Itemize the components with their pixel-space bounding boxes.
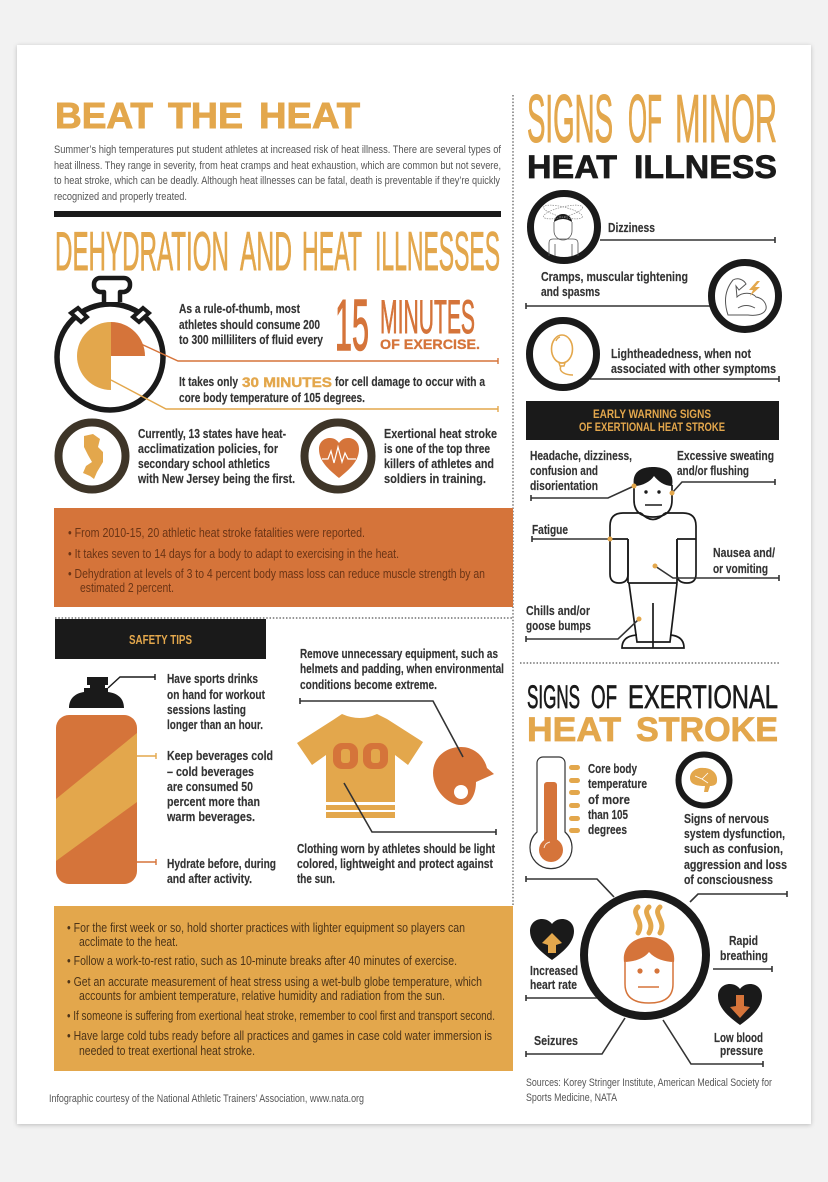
panel: heat stroke facts: • It takes seven to 14 days for a body to adapt to exercising in the heat. xyxy=(68,547,399,561)
sources xyxy=(526,1077,772,1104)
label: cramps: and spasms xyxy=(541,285,600,299)
panel: practice guidelines: • For the first week or so, hold shorter practices with lighter equipment so players can xyxy=(67,921,465,935)
callout: 15 minutes of exercise: 15 xyxy=(335,286,369,366)
exertional heat stroke text: is one of the top three xyxy=(384,442,490,456)
heading: signs of minor heat illness xyxy=(527,81,777,185)
exertional heat stroke text: killers of athletes and xyxy=(384,457,494,471)
label: nausea: or vomiting xyxy=(713,562,768,576)
tip: sports drinks: longer than an hour. xyxy=(167,718,263,732)
fluid rule text xyxy=(179,302,323,347)
pointer lines: early warning xyxy=(526,479,779,642)
fluid rule text: athletes should consume 200 xyxy=(179,318,320,332)
label: nervous system dysfunction: of consciousness xyxy=(684,873,773,887)
icon: stopwatch with pie xyxy=(57,278,163,410)
heading: signs of minor heat illness: OF xyxy=(628,81,662,157)
tip: hydrate: Hydrate before, during xyxy=(167,857,276,871)
tip: hydrate xyxy=(167,857,276,886)
tip: cold beverages: are consumed 50 xyxy=(167,780,253,794)
label: core body temperature xyxy=(588,762,647,837)
label: lightheadedness: Lightheadedness, when not xyxy=(611,347,752,361)
intro text xyxy=(54,144,502,203)
acclimatization text: secondary school athletics xyxy=(138,457,270,471)
fluid rule text: to 300 milliliters of fluid every xyxy=(179,333,323,347)
icon: heart with up arrow xyxy=(530,919,574,960)
pointer lines: heat stroke xyxy=(526,876,787,1067)
label: low blood pressure: pressure xyxy=(720,1044,763,1058)
icon: thermometer xyxy=(530,757,580,869)
icon: heart with down arrow xyxy=(718,984,762,1025)
heading: signs of exertional heat stroke: OF xyxy=(591,679,617,715)
panel: practice guidelines: acclimate to the heat. xyxy=(79,935,178,949)
sources: Sports Medicine, NATA xyxy=(526,1092,618,1104)
title: beat the heat: BEAT xyxy=(55,95,153,136)
panel: practice guidelines: • Have large cold tubs ready before all practices and games in case cold water immersion is xyxy=(67,1029,492,1043)
heading: signs of minor heat illness: HEAT xyxy=(527,149,617,185)
label: rapid breathing: breathing xyxy=(720,949,768,963)
panel: practice guidelines: • Get an accurate measurement of heat stress using a wet-bulb globe temperature, which xyxy=(67,975,482,989)
exertional heat stroke text xyxy=(384,427,497,486)
label: core body temperature: Core body xyxy=(588,762,637,776)
tip: cold beverages: percent more than xyxy=(167,795,260,809)
orange pointer line xyxy=(141,344,498,364)
intro text: heat illness. They range in severity, from heat cramps and heat exhaustion, which are common but not severe, xyxy=(54,160,501,172)
intro text: Summer’s high temperatures put student athletes at increased risk of heat illness. There are several types of xyxy=(54,144,502,156)
heading: dehydration and heat illnesses: HEAT xyxy=(302,220,362,282)
callout: 30 minutes text: core body temperature of 105 degrees. xyxy=(179,391,365,405)
label: nausea: Nausea and/ xyxy=(713,546,775,560)
icon: flexed muscle xyxy=(712,262,778,330)
callout: 30 minutes text: It takes only xyxy=(179,375,238,389)
label: excessive sweating: Excessive sweating xyxy=(677,449,774,463)
label: core body temperature: than 105 xyxy=(588,808,628,822)
panel: practice guidelines: • If someone is suffering from exertional heat stroke, remember to cool first and transport second. xyxy=(67,1009,495,1023)
callout: 15 minutes of exercise xyxy=(335,286,480,366)
heading: signs of exertional heat stroke xyxy=(527,679,778,749)
panel: practice guidelines: accounts for ambient temperature, relative humidity and radiation from the sun. xyxy=(79,989,445,1003)
tip: clothing xyxy=(297,842,496,886)
tip: remove equipment: conditions become extreme. xyxy=(300,678,437,692)
icon: heart with pulse xyxy=(304,422,372,490)
icon: new jersey xyxy=(58,422,126,490)
icon: dizziness xyxy=(530,194,598,260)
tip: sports drinks: on hand for workout xyxy=(167,688,266,702)
tip: sports drinks: Have sports drinks xyxy=(167,672,258,686)
label: chills xyxy=(526,604,591,633)
label: dizziness: Dizziness xyxy=(608,221,655,235)
callout: 30 minutes text: for cell damage to occur with a xyxy=(335,375,486,389)
label: excessive sweating: and/or flushing xyxy=(677,464,749,478)
pointer line: helmet xyxy=(300,698,463,757)
pointer line: jersey xyxy=(344,783,496,835)
label: headache xyxy=(530,449,632,493)
icon: brain xyxy=(678,754,730,806)
heading: signs of minor heat illness: ILLNESS xyxy=(634,149,777,185)
figure: athlete with warning signs xyxy=(610,467,696,648)
footer credit: Infographic courtesy of the National Athletic Trainers’ Association, www.nata.org xyxy=(49,1093,364,1105)
label: lightheadedness: associated with other symptoms xyxy=(611,362,776,376)
heading: dehydration and heat illnesses: DEHYDRATION xyxy=(55,220,229,282)
panel: practice guidelines xyxy=(54,906,513,1071)
tip: sports drinks: sessions lasting xyxy=(167,703,246,717)
label: low blood pressure xyxy=(714,1031,763,1058)
tip: cold beverages: warm beverages. xyxy=(166,810,255,824)
heading: dehydration and heat illnesses: AND xyxy=(240,220,292,282)
label: chills: Chills and/or xyxy=(526,604,590,618)
panel: heat stroke facts xyxy=(54,508,513,607)
label: cramps xyxy=(541,270,688,299)
title: beat the heat: THE xyxy=(168,95,243,136)
tip: remove equipment xyxy=(300,647,504,692)
label: seizures: Seizures xyxy=(534,1034,578,1048)
tip: cold beverages: – cold beverages xyxy=(167,765,254,779)
icon: balloon xyxy=(530,320,596,388)
label: increased heart rate xyxy=(530,964,578,992)
label: nervous system dysfunction: system dysfunction, xyxy=(684,827,785,841)
callout: 30 minutes text xyxy=(179,374,486,405)
tip: hydrate: and after activity. xyxy=(167,872,252,886)
heading: early warning signs xyxy=(526,401,779,440)
pointer lines: minor signs xyxy=(526,237,779,382)
label: lightheadedness xyxy=(611,347,776,376)
heading: signs of exertional heat stroke: EXERTIONAL xyxy=(628,679,778,715)
label: core body temperature: temperature xyxy=(588,777,647,791)
pointer lines for bottle xyxy=(108,674,156,865)
intro text: to heat stroke, which can be deadly. Although heat illnesses can be fatal, death is preventable if they’re quickly xyxy=(54,175,500,187)
heading: safety tips xyxy=(55,619,266,659)
acclimatization text: Currently, 13 states have heat- xyxy=(138,427,286,441)
title: beat the heat xyxy=(55,95,360,136)
tip: sports drinks xyxy=(167,672,266,732)
acclimatization text: with New Jersey being the first. xyxy=(137,472,295,486)
tip: clothing: the sun. xyxy=(297,872,335,886)
tip: cold beverages: Keep beverages cold xyxy=(167,749,273,763)
label: increased heart rate: heart rate xyxy=(530,978,577,992)
panel: practice guidelines: needed to treat exertional heat stroke. xyxy=(79,1044,255,1058)
label: rapid breathing xyxy=(720,934,768,963)
title: beat the heat: HEAT xyxy=(259,95,360,136)
heading: signs of exertional heat stroke: SIGNS xyxy=(527,679,580,715)
heading: signs of exertional heat stroke: STROKE xyxy=(636,711,778,749)
exertional heat stroke text: Exertional heat stroke xyxy=(384,427,497,441)
icon: sports bottle xyxy=(56,677,137,884)
fluid rule text: As a rule-of-thumb, most xyxy=(179,302,301,316)
icon: jersey xyxy=(297,714,423,818)
heading: early warning signs: EARLY WARNING SIGNS xyxy=(593,409,711,421)
tip: remove equipment: helmets and padding, when environmental xyxy=(300,662,504,676)
panel: practice guidelines: • Follow a work-to-rest ratio, such as 10-minute breaks after 40 minutes of exercise. xyxy=(67,954,457,968)
callout: 15 minutes of exercise: OF EXERCISE. xyxy=(380,336,480,352)
callout: 30 minutes text: 30 MINUTES xyxy=(242,374,332,390)
label: low blood pressure: Low blood xyxy=(714,1031,763,1045)
heading: signs of exertional heat stroke: HEAT xyxy=(527,711,621,749)
label: cramps: Cramps, muscular tightening xyxy=(541,270,688,284)
panel: heat stroke facts: • Dehydration at levels of 3 to 4 percent body mass loss can reduce muscle strength by an xyxy=(68,567,485,581)
label: fatigue: Fatigue xyxy=(532,523,568,537)
label: nervous system dysfunction xyxy=(684,812,787,887)
label: core body temperature: degrees xyxy=(588,823,627,837)
sources: Sources: Korey Stringer Institute, American Medical Society for xyxy=(526,1077,772,1089)
label: headache: disorientation xyxy=(530,479,598,493)
label: nausea xyxy=(713,546,775,576)
icon: overheated face xyxy=(584,894,706,1016)
label: headache: Headache, dizziness, xyxy=(530,449,632,463)
heading: signs of minor heat illness: SIGNS xyxy=(527,81,613,157)
text: MINUTES xyxy=(380,290,475,343)
acclimatization text xyxy=(137,427,295,486)
label: nervous system dysfunction: such as confusion, xyxy=(684,842,783,856)
tip: clothing: Clothing worn by athletes should be light xyxy=(297,842,496,856)
label: nervous system dysfunction: Signs of nervous xyxy=(684,812,769,826)
label: core body temperature: of more xyxy=(588,793,630,807)
label: nervous system dysfunction: aggression and loss xyxy=(684,858,787,872)
exertional heat stroke text: soldiers in training. xyxy=(384,472,486,486)
text: ILLNESSES xyxy=(375,220,500,282)
tip: clothing: colored, lightweight and protect against xyxy=(297,857,494,871)
icon: helmet xyxy=(433,747,494,805)
gold pointer line xyxy=(111,380,498,412)
panel: heat stroke facts: • From 2010-15, 20 athletic heat stroke fatalities were reported. xyxy=(68,526,365,540)
label: excessive sweating xyxy=(677,449,774,478)
acclimatization text: acclimatization policies, for xyxy=(138,442,278,456)
intro text: recognized and properly treated. xyxy=(54,191,187,203)
label: headache: confusion and xyxy=(530,464,598,478)
heading: early warning signs: OF EXERTIONAL HEAT STROKE xyxy=(579,422,725,434)
panel: heat stroke facts: estimated 2 percent. xyxy=(80,581,174,595)
label: rapid breathing: Rapid xyxy=(729,934,758,948)
tip: remove equipment: Remove unnecessary equipment, such as xyxy=(300,647,498,661)
tip: cold beverages xyxy=(166,749,273,824)
label: increased heart rate: Increased xyxy=(530,964,578,978)
label: chills: goose bumps xyxy=(526,619,591,633)
heading: safety tips: SAFETY TIPS xyxy=(129,632,192,647)
